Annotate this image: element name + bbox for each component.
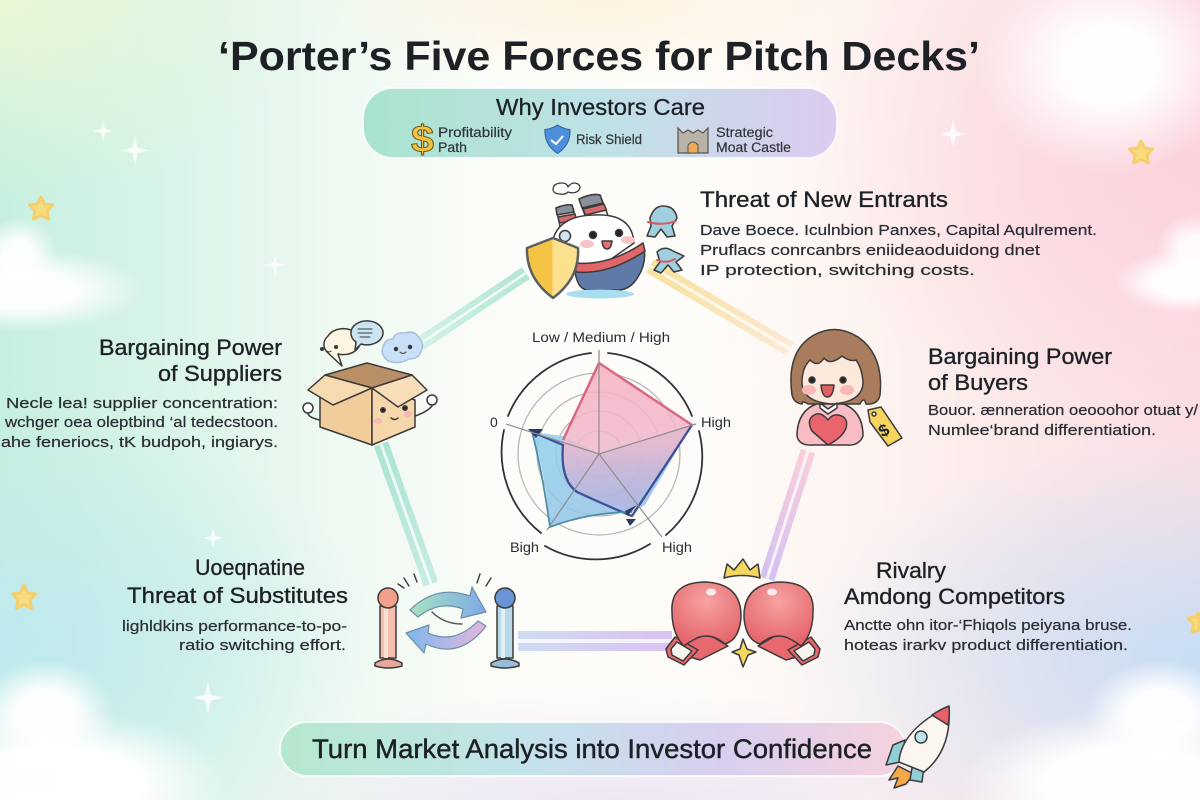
text: threat of substitutes: Uoeqnatine (195, 555, 305, 580)
icon: girl with heart: $ (875, 420, 893, 441)
text: rivalry among competitors: hoteas irarkv product differentiation. (844, 638, 1128, 654)
text: rivalry among competitors (844, 558, 1132, 654)
text: bargaining power of buyers: Bouor. ænneration oeooohor otuat y/ (928, 403, 1199, 419)
text: bargaining power of suppliers: wchger oea oleptbind ‘al tedecstoon. (4, 415, 278, 431)
sparkles (93, 120, 967, 714)
text: bargaining power of buyers: Numlee‘brand differentiation. (928, 423, 1156, 439)
text: bargaining power of buyers: Bargaining Power (928, 344, 1112, 369)
text: bargaining power of suppliers: Bargaining Power (99, 335, 282, 360)
icon: girl with heart (791, 329, 902, 446)
radar axis labels (490, 329, 731, 555)
text: bargaining power of buyers: of Buyers (928, 370, 1028, 395)
text: bargaining power of suppliers: of Suppliers (158, 361, 282, 386)
text: threat of new entrants: Dave Boece. Iculnbion Panxes, Capital Aqulrement. (700, 223, 1097, 239)
icon: moat castle (678, 128, 708, 153)
text: rivalry among competitors: Amdong Competitors (844, 584, 1065, 609)
radar axis labels: Bigh (510, 539, 539, 555)
text: bargaining power of suppliers: ahe feneriocs, tK budpoh, ingiarys. (1, 435, 278, 451)
icon: substitution posts and arrows (375, 574, 519, 668)
stars (12, 141, 1199, 632)
radar axis labels: 0 (490, 414, 498, 430)
label: profitability path: Path (438, 140, 467, 155)
text: threat of substitutes: ratio switching effort. (179, 638, 346, 654)
label: profitability path: Profitability (438, 125, 512, 140)
icon: ship (527, 183, 684, 298)
label: strategic moat castle (716, 125, 791, 155)
icon: cardboard box (303, 321, 437, 445)
label: risk shield: Risk Shield (576, 132, 642, 147)
banner (280, 722, 906, 776)
text: rivalry among competitors: Rivalry (876, 558, 946, 583)
title: ‘Porter’s Five Forces for Pitch Decks’ (218, 33, 980, 79)
icon: rocket (886, 706, 949, 788)
text: bargaining power of suppliers: Necle lea! supplier concentration: (6, 396, 278, 412)
label: profitability path (438, 125, 512, 155)
icon: risk shield (545, 125, 570, 154)
text: rivalry among competitors: Anctte ohn itor-‘Fhiqols peiyana bruse. (844, 618, 1132, 634)
panel heading: Why Investors Care (496, 94, 705, 120)
label: strategic moat castle: Moat Castle (716, 140, 791, 155)
panel: why investors care (363, 88, 837, 161)
text: threat of new entrants (700, 187, 1097, 279)
text: threat of substitutes: Threat of Substitutes (127, 583, 348, 608)
label: strategic moat castle: Strategic (716, 125, 773, 140)
radar chart (490, 329, 731, 559)
radar axis labels: High (662, 539, 692, 555)
radar axis labels: Low / Medium / High (532, 329, 670, 345)
text: threat of new entrants: Threat of New Entrants (700, 187, 948, 212)
text: bargaining power of buyers (928, 344, 1199, 439)
pentagon connector bands (381, 266, 808, 641)
icon: boxing gloves (666, 559, 820, 667)
banner text: Turn Market Analysis into Investor Confidence (312, 734, 872, 764)
pink series (562, 363, 692, 510)
text: threat of new entrants: IP protection, switching costs. (700, 263, 975, 279)
icon: dollar: $ (411, 119, 434, 161)
blue series (532, 425, 692, 527)
text: threat of new entrants: Pruflacs conrcanbrs eniideaoduidong dnet (700, 243, 1040, 259)
text: bargaining power of suppliers (1, 335, 282, 451)
text: threat of substitutes: lighldkins performance-to-po- (122, 619, 347, 635)
radar axis labels: High (701, 414, 731, 430)
text: threat of substitutes (122, 555, 348, 654)
